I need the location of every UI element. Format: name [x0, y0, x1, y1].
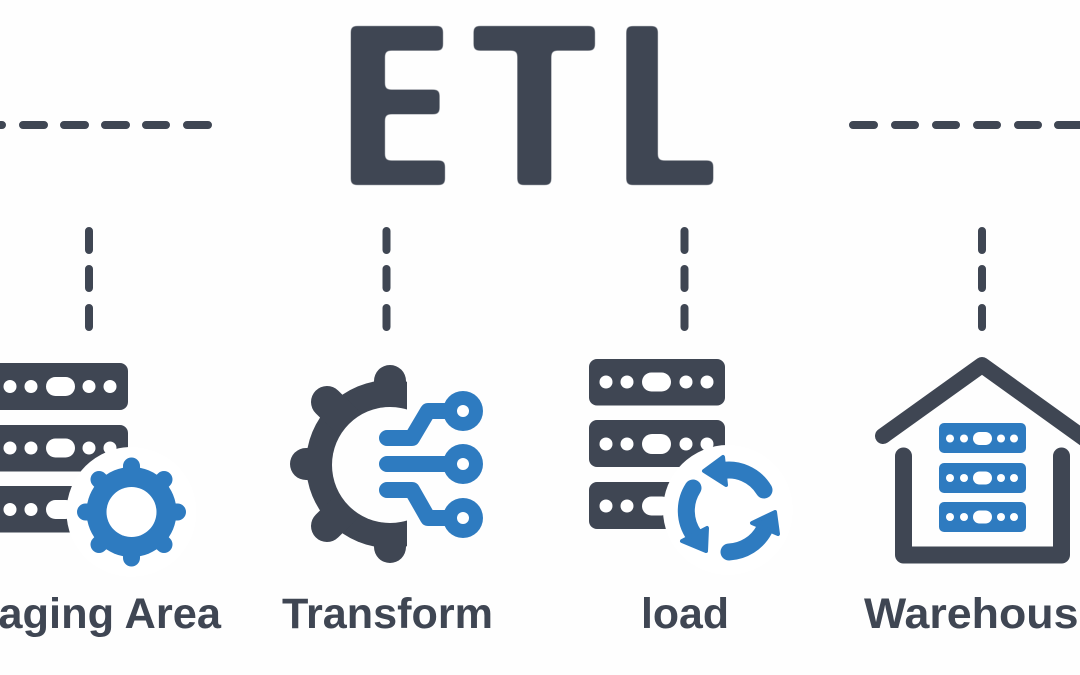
title	[334, 0, 718, 244]
label: load: load	[641, 590, 729, 638]
icon: load server with cycle arrows	[589, 359, 793, 575]
vertical dashed connector: load	[680, 231, 688, 327]
vertical dashed connector: warehouse	[978, 231, 986, 327]
right dashed connector	[853, 121, 1080, 129]
icon: staging area server with gear	[0, 363, 196, 577]
left dashed connector	[0, 121, 208, 129]
vertical dashed connector: transform	[382, 231, 390, 327]
label: transform: Transform	[282, 590, 493, 638]
vertical dashed connector: staging area	[85, 231, 93, 327]
icon: warehouse house with servers	[883, 365, 1080, 555]
icon: transform half gear with circuit	[306, 380, 483, 548]
